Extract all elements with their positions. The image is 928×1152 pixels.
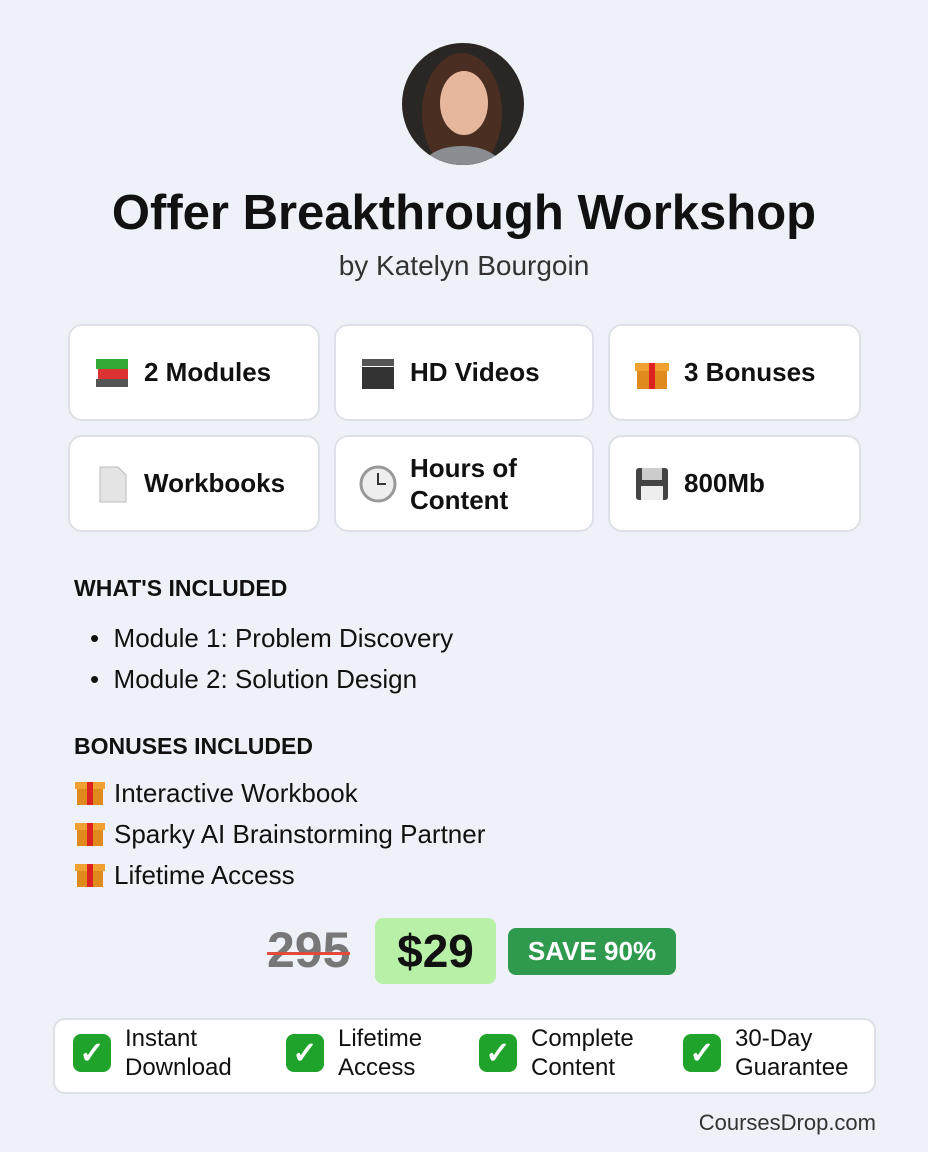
heading: what's included: WHAT'S INCLUDED [74, 575, 287, 601]
card: hours: Content [410, 484, 508, 514]
check: content: Complete [531, 1025, 634, 1052]
check: guarantee [683, 1025, 848, 1081]
list: modules: • Module 1: Problem Discovery [90, 623, 453, 653]
card: bonuses [608, 324, 861, 421]
card: hours: Hours of [410, 452, 517, 482]
card: modules [68, 324, 320, 421]
card: workbooks [68, 435, 320, 532]
check: content: ✓ [485, 1036, 511, 1070]
footer: CoursesDrop.com [699, 1110, 876, 1135]
card: workbooks: Workbooks [144, 468, 285, 498]
card: videos [334, 324, 594, 421]
price: $29 [397, 925, 474, 977]
old price: 295 [267, 922, 350, 978]
avatar [402, 43, 524, 165]
list: bonuses: Interactive Workbook [114, 778, 358, 808]
card: size [608, 435, 861, 532]
list: bonuses: Sparky AI Brainstorming Partner [114, 819, 485, 849]
guarantees bar [53, 1018, 876, 1094]
check: lifetime: Lifetime [338, 1025, 422, 1052]
save badge: SAVE 90% [528, 936, 656, 966]
price [375, 918, 496, 984]
list: modules [90, 623, 453, 694]
heading: bonuses: BONUSES INCLUDED [74, 733, 313, 759]
check: instant: ✓ [79, 1036, 105, 1070]
check: guarantee: 30-Day [735, 1025, 812, 1052]
check: instant [73, 1025, 232, 1081]
list: bonuses: Lifetime Access [114, 860, 295, 890]
check: instant: Instant [125, 1025, 197, 1052]
check: guarantee: Guarantee [735, 1054, 848, 1081]
check: content [479, 1025, 634, 1081]
subtitle: by Katelyn Bourgoin [339, 250, 589, 281]
check: guarantee: ✓ [689, 1036, 715, 1070]
list: bonuses [75, 778, 485, 890]
save badge [508, 928, 676, 975]
card: modules: 2 Modules [144, 357, 271, 387]
card: hours [334, 435, 594, 532]
title: Offer Breakthrough Workshop [112, 186, 816, 240]
check: content: Content [531, 1054, 615, 1081]
check: lifetime: Access [338, 1054, 415, 1081]
check: lifetime: ✓ [292, 1036, 318, 1070]
list: modules: • Module 2: Solution Design [90, 664, 417, 694]
card: bonuses: 3 Bonuses [684, 357, 816, 387]
check: instant: Download [125, 1054, 232, 1081]
check: lifetime [286, 1025, 422, 1081]
card: size: 800Mb [684, 468, 765, 498]
card: videos: HD Videos [410, 357, 540, 387]
